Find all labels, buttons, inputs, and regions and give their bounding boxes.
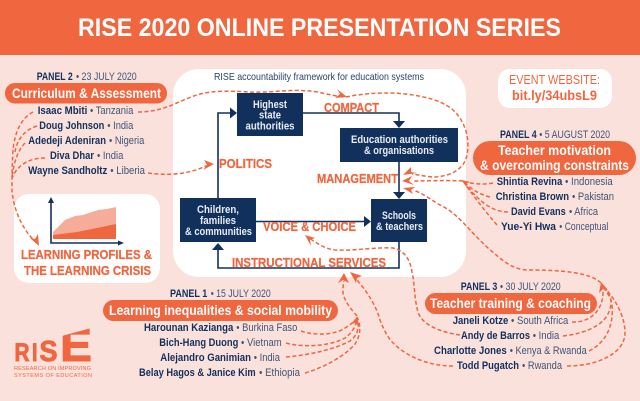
panel 1 speakers: • Vietnam	[241, 337, 282, 349]
panel 2 date: PANEL 2	[37, 71, 73, 83]
panel 2 speakers: • Liberia	[110, 165, 146, 177]
panel: event website: bit.ly/34ubsL9	[512, 88, 597, 103]
dashed connector: Todd Pugatch to instructional services	[350, 272, 453, 366]
panel 1 speakers: Harounan Kazianga	[144, 322, 234, 334]
panel: event website	[498, 69, 612, 108]
logo tagline: SYSTEMS OF EDUCATION	[14, 373, 92, 379]
logo: RISE	[14, 319, 95, 379]
panel 3 group	[425, 281, 597, 372]
panel 4 speakers: • Africa	[569, 206, 599, 218]
panel 3 speakers	[434, 315, 587, 372]
panel 4 speakers: Christina Brown	[496, 191, 569, 203]
panel 4 heading pill: Teacher motivation	[498, 142, 611, 158]
panel 2 speakers: Isaac Mbiti	[38, 105, 87, 117]
panel 2 speakers: • Tanzania	[90, 105, 134, 117]
area chart	[48, 197, 124, 246]
panel 3 speakers: Todd Pugatch	[457, 360, 519, 372]
panel 3 heading pill	[425, 293, 597, 314]
panel 4 speakers: • Conceptual	[559, 221, 608, 233]
panel 1 group	[103, 288, 338, 379]
box: education authorities	[340, 128, 458, 162]
panel 4 speakers: Shintia Revina	[497, 176, 563, 188]
framework connectors	[212, 108, 405, 268]
panel 3 speakers: Andy de Barros	[461, 330, 530, 342]
panel 2 heading pill: Curriculum & Assessment	[12, 85, 161, 101]
dashed connector: Andy de Barros to voice and choice	[305, 235, 460, 335]
panel 1 speakers: Belay Hagos & Janice Kim	[139, 367, 256, 379]
dashed connectors: panel 3 to management	[403, 187, 625, 366]
panel: learning profiles	[14, 194, 160, 283]
panel 3 speakers: Janeli Kotze	[453, 315, 508, 327]
panel 3 speakers: • Kenya & Rwanda	[510, 345, 587, 357]
logo slant mask	[58, 322, 95, 337]
title: RISE 2020 ONLINE PRESENTATION SERIES	[78, 14, 561, 42]
panel 2 speakers: • Nigeria	[109, 135, 145, 147]
box: highest state authorities: Highest	[253, 99, 287, 111]
box: highest state authorities: state	[259, 110, 281, 122]
panel 1 speakers	[139, 322, 301, 379]
label: instructional services: INSTRUCTIONAL SERVICES	[232, 255, 386, 270]
logo tagline: RESEARCH ON IMPROVING	[14, 366, 91, 372]
logo wordmark: S	[40, 336, 58, 368]
panel 4 speakers	[496, 176, 614, 233]
panel 1 heading pill	[103, 300, 338, 321]
framework heading: RISE accountability framework for education systems	[214, 71, 424, 83]
panel 4 date: • 5 AUGUST 2020	[539, 129, 610, 141]
panel 3 speakers: • Rwanda	[522, 360, 563, 372]
panel 4 speakers: • Indonesia	[565, 176, 613, 188]
box: highest state authorities	[237, 93, 303, 136]
label: voice and choice: VOICE & CHOICE	[263, 219, 356, 234]
panel 1 speakers: • India	[254, 352, 281, 364]
panel 1 date: PANEL 1	[170, 288, 207, 300]
panel 2 speakers	[28, 105, 146, 177]
logo wordmark	[14, 319, 92, 371]
panel 3 heading pill: Teacher training & coaching	[430, 295, 591, 311]
panel 2 heading pill	[5, 83, 167, 104]
panel: learning profiles: THE LEARNING CRISIS	[24, 263, 151, 278]
panel 1 speakers: • Ethiopia	[259, 367, 301, 379]
panel 1 date: • 15 JULY 2020	[211, 288, 271, 300]
box: education authorities: & organisations	[364, 145, 434, 157]
logo wordmark: R	[14, 339, 30, 367]
dashed connectors: panel 4 to management	[402, 176, 508, 225]
box: children, families and communities	[180, 198, 256, 242]
header banner	[0, 0, 640, 55]
dashed connector: Wayne Sandholtz to politics	[148, 160, 214, 174]
label: compact: COMPACT	[324, 100, 379, 115]
logo wordmark: I	[32, 339, 38, 367]
panel: accountability framework	[173, 69, 466, 277]
panel 3 date: • 30 JULY 2020	[500, 281, 561, 293]
panel 2 speakers: • India	[107, 120, 134, 132]
box: schools and teachers: & teachers	[376, 221, 423, 233]
logo tagline	[14, 366, 92, 379]
logo wordmark: E	[60, 319, 92, 371]
panel 4 heading pill	[473, 141, 636, 175]
panel 4 date: PANEL 4	[500, 129, 537, 141]
box: children, families and communities: Children,	[197, 204, 239, 216]
panel 2 speakers: Wayne Sandholtz	[28, 165, 108, 177]
panel 1 heading pill: Learning inequalities & social mobility	[109, 302, 332, 318]
panel 2 date: • 23 JULY 2020	[76, 71, 137, 83]
panel 2 speakers: Doug Johnson	[39, 120, 105, 132]
box: schools and teachers: Schools	[382, 210, 416, 222]
panel 1 speakers: • Burkina Faso	[236, 322, 297, 334]
learning profiles heading: LEARNING PROFILES &	[21, 247, 152, 262]
label: management: MANAGEMENT	[317, 171, 398, 186]
box: schools and teachers	[371, 199, 427, 242]
panel 4 speakers: David Evans	[511, 206, 566, 218]
panel 2 speakers: • India	[97, 150, 124, 162]
dashed connectors: panel 1 to instructional services	[286, 273, 360, 373]
panel 3 speakers: Charlotte Jones	[434, 345, 507, 357]
panel 2 group	[5, 71, 167, 177]
dashed connectors: panel 2 to learning profiles	[12, 112, 45, 246]
box: children, families and communities: & communities	[185, 226, 252, 238]
panel 1 speakers: Bich-Hang Duong	[159, 337, 238, 349]
panel: event website: EVENT WEBSITE:	[509, 72, 600, 87]
panel 4 group	[473, 129, 636, 233]
panel 4 speakers: Yue-Yi Hwa	[501, 221, 557, 233]
panel 4 speakers: • Pakistan	[572, 191, 614, 203]
panel 2 speakers: Diva Dhar	[50, 150, 95, 162]
dashed connector: Isaac Mbiti to compact and management	[138, 89, 468, 177]
box: children, families and communities: families	[200, 215, 236, 227]
label: politics: POLITICS	[219, 156, 272, 171]
panel 3 date: PANEL 3	[461, 281, 497, 293]
box: education authorities: Education authorities	[351, 134, 448, 146]
panel 2 speakers: Adedeji Adeniran	[28, 135, 106, 147]
panel 3 speakers: • India	[533, 330, 560, 342]
panel 1 speakers: Alejandro Ganimian	[160, 352, 251, 364]
box: highest state authorities: authorities	[246, 120, 294, 132]
panel 3 speakers: • South Africa	[511, 315, 569, 327]
